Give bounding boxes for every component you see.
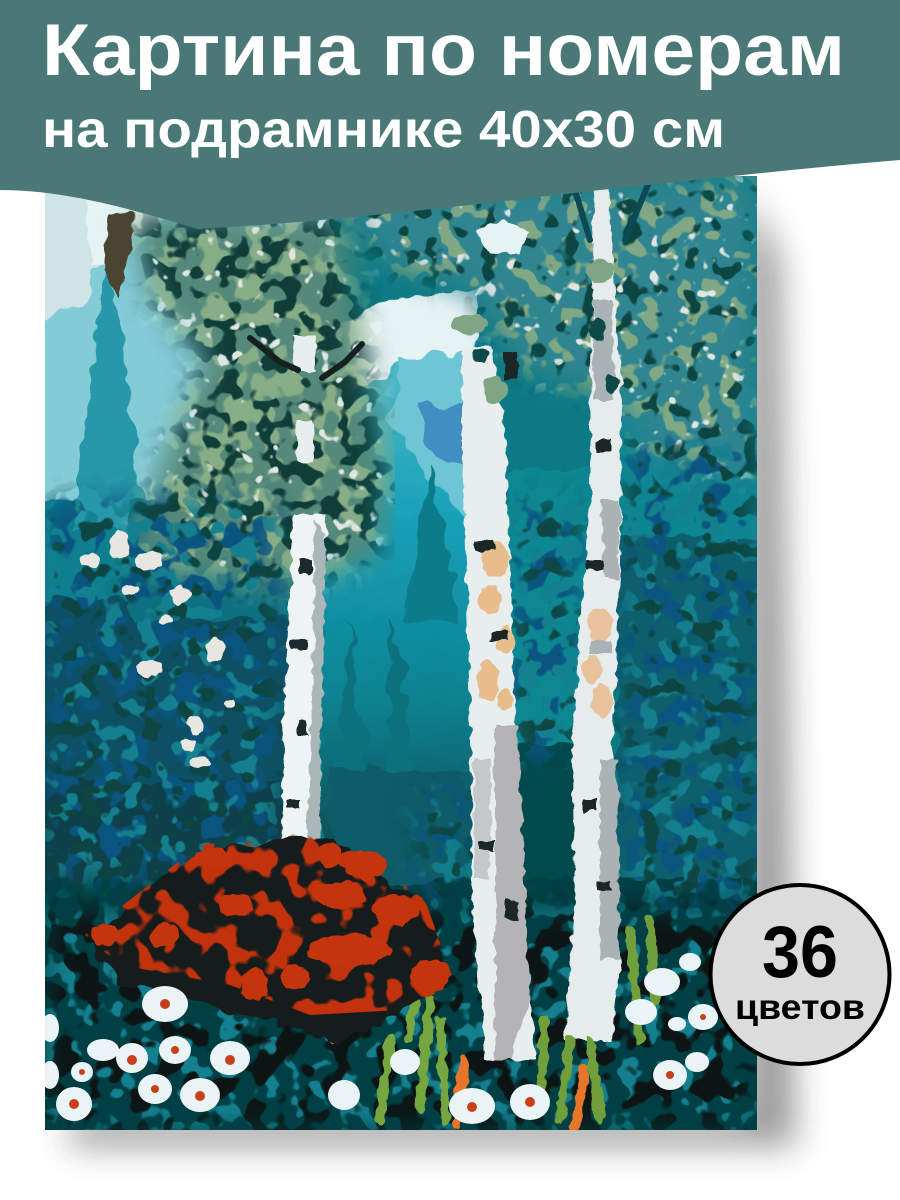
white daisies xyxy=(41,953,718,1124)
title: Картина по номерам xyxy=(42,10,845,91)
blossom trail xyxy=(80,531,235,769)
badge label: цветов xyxy=(735,988,865,1027)
leaves over the upper trunks xyxy=(452,258,618,404)
header band xyxy=(0,0,900,229)
background base colour xyxy=(104,176,757,878)
badge: 36 colours xyxy=(710,885,890,1064)
birch trunk right xyxy=(564,180,622,1040)
badge number: 36 xyxy=(762,912,838,993)
painting: birch forest xyxy=(30,176,770,1140)
misty sky upper left xyxy=(45,192,336,600)
canvas drop shadow xyxy=(70,190,795,1146)
birch trunk left xyxy=(280,335,326,920)
foliage left tree crown xyxy=(116,208,395,608)
deep teal between trunks xyxy=(30,380,770,1140)
subtitle: на подрамнике 40х30 см xyxy=(42,101,725,159)
foliage right canopy xyxy=(320,176,760,506)
distant conifer left xyxy=(75,250,150,530)
red flower bush xyxy=(80,830,460,1045)
light centre glade xyxy=(320,290,480,900)
brown branch cluster top left xyxy=(104,212,135,300)
lower forest dappled sides xyxy=(45,430,757,910)
undergrowth dappled xyxy=(45,880,757,1130)
white cloud gap upper right xyxy=(475,220,530,255)
dark branches xyxy=(250,180,650,378)
grass greens xyxy=(335,920,655,1125)
birch trunk middle xyxy=(462,345,535,1060)
